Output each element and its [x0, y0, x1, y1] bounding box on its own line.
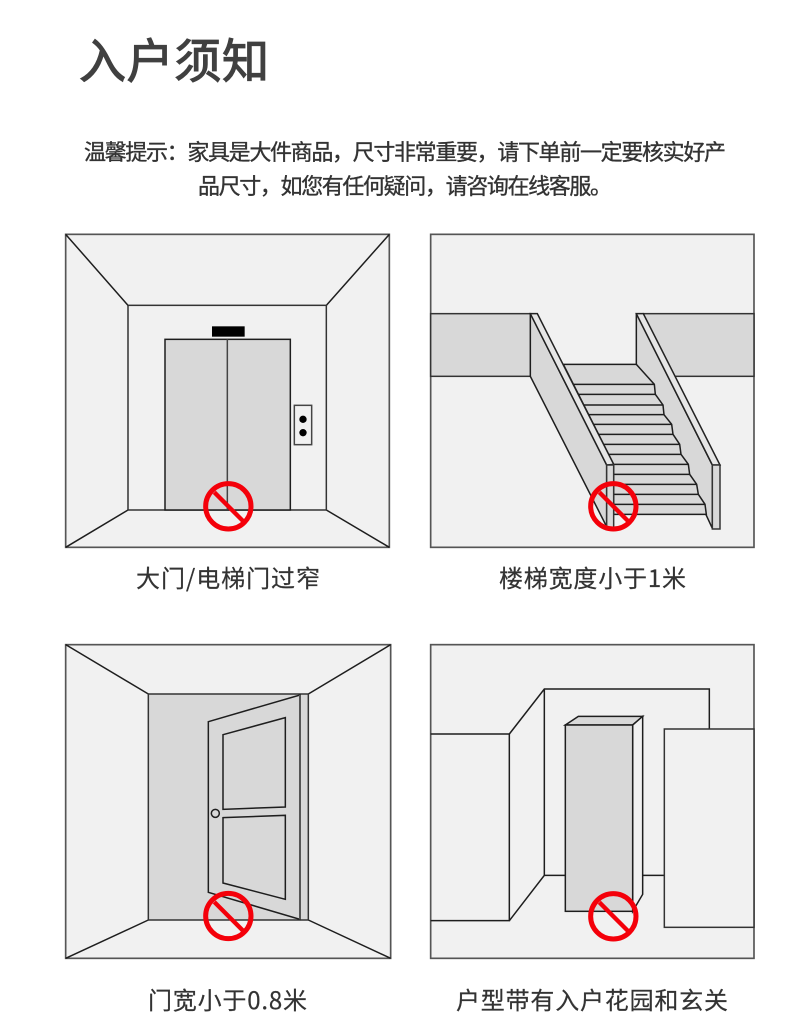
right post: [712, 465, 720, 529]
back wall and corridor: [509, 689, 709, 921]
title: 入户须知: [79, 23, 269, 92]
text block: reminder: [84, 135, 726, 201]
panel: door width too small: [66, 645, 391, 958]
label: door too narrow: 大门/电梯门过窄: [136, 559, 320, 594]
text block: reminder: 品尺寸，如您有任何疑问，请咨询在线客服。: [198, 169, 612, 201]
left post: [607, 465, 614, 528]
perspective lines: [66, 645, 391, 958]
icon: prohibited sign: [206, 893, 251, 939]
right stair wall: [636, 314, 712, 528]
left stair wall: [530, 314, 607, 527]
icon: prohibited sign: [206, 484, 251, 529]
text block: reminder: 温馨提示：家具是大件商品，尺寸非常重要，请下单前一定要核实好产: [84, 135, 726, 167]
back wall: [148, 694, 308, 920]
left landing wall: [431, 314, 531, 376]
right landing wall: [643, 314, 754, 376]
elevator call buttons: [294, 405, 312, 445]
perspective lines: [66, 234, 389, 547]
back wall: [128, 305, 326, 510]
right rail: [636, 314, 720, 465]
panel: entry garden and hallway: [431, 645, 754, 958]
panel: staircase too narrow: [431, 234, 754, 547]
stairs: [563, 364, 706, 514]
label: stairs too narrow: 楼梯宽度小于1米: [499, 559, 686, 594]
left wall: [431, 734, 509, 921]
icon: prohibited sign: [591, 894, 636, 939]
label: entry garden: 户型带有入户花园和玄关: [456, 981, 728, 1016]
open door: [208, 695, 300, 919]
left rail: [530, 314, 614, 465]
icon: prohibited sign: [591, 484, 636, 529]
right wall: [664, 729, 754, 927]
furniture cabinet: [565, 716, 643, 911]
elevator indicator: [212, 326, 245, 337]
panel: elevator door too narrow: [66, 234, 389, 547]
elevator doors: [165, 339, 290, 510]
label: door width: 门宽小于0.8米: [148, 981, 307, 1016]
